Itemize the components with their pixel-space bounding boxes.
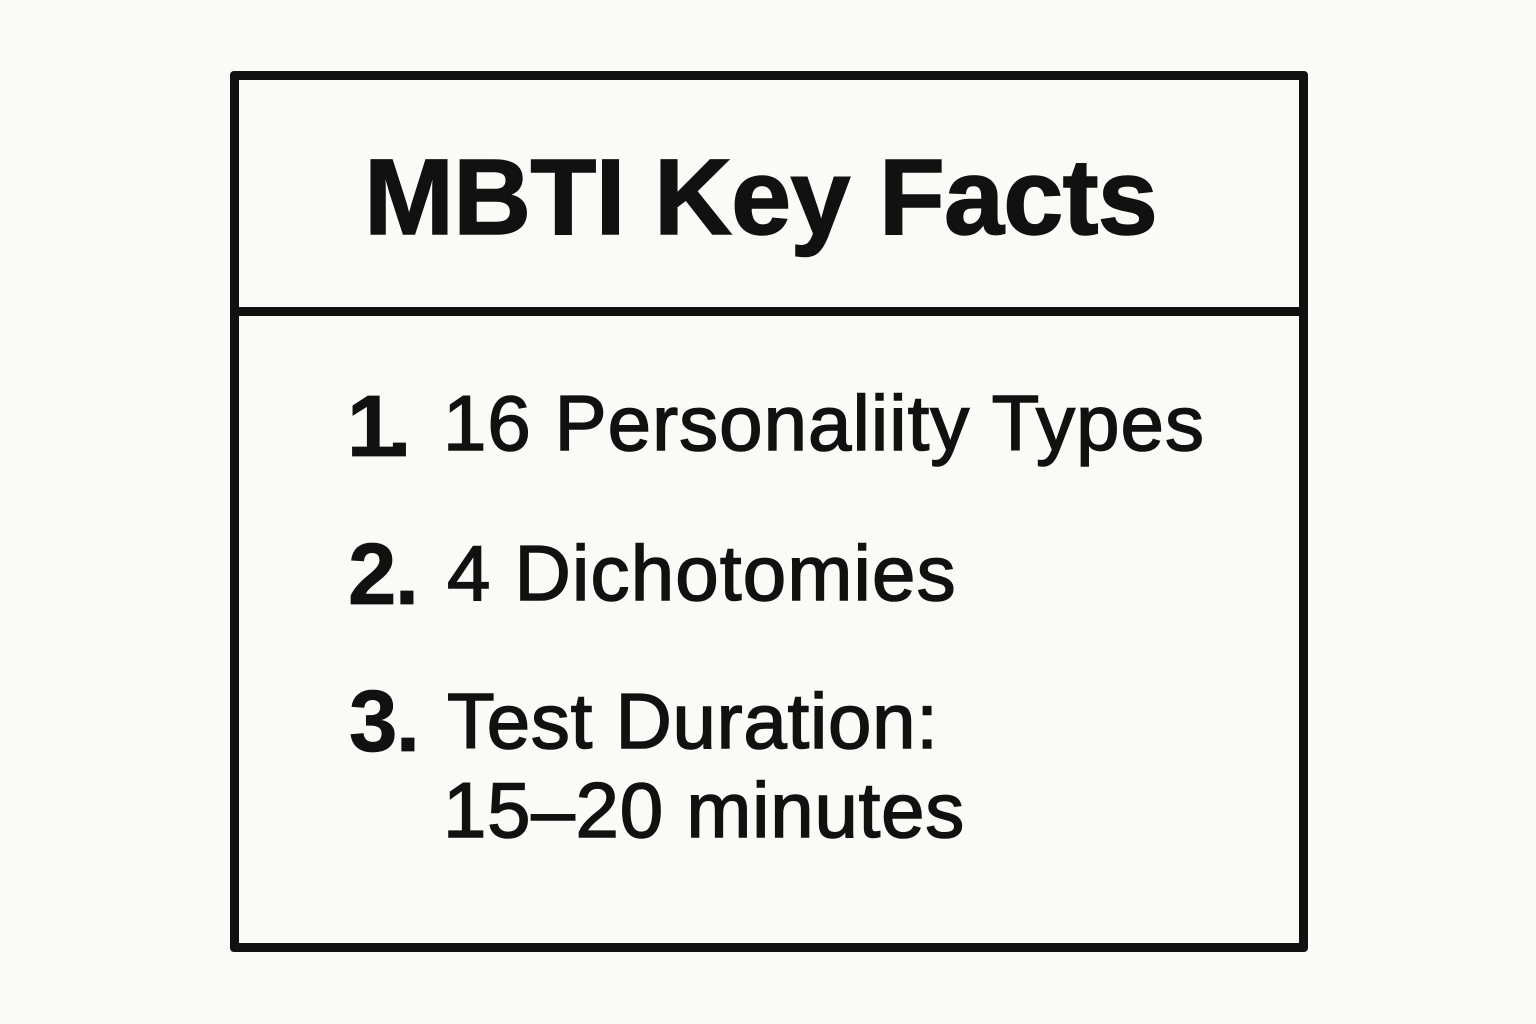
header divider	[234, 307, 1304, 316]
title: MBTI Key Facts	[364, 136, 1157, 257]
fact 3 text line 2: 15–20 minutes	[443, 766, 965, 854]
number 1: 1.	[347, 378, 404, 475]
fact 1 text: 16 Personaliity Types	[443, 379, 1205, 467]
fact 2 text: 4 Dichotomies	[447, 529, 957, 617]
number 3: 3.	[349, 673, 419, 770]
number 2: 2.	[348, 526, 418, 623]
panel outer frame	[230, 71, 1308, 952]
fact 3 text line 1: Test Duration:	[447, 677, 939, 765]
